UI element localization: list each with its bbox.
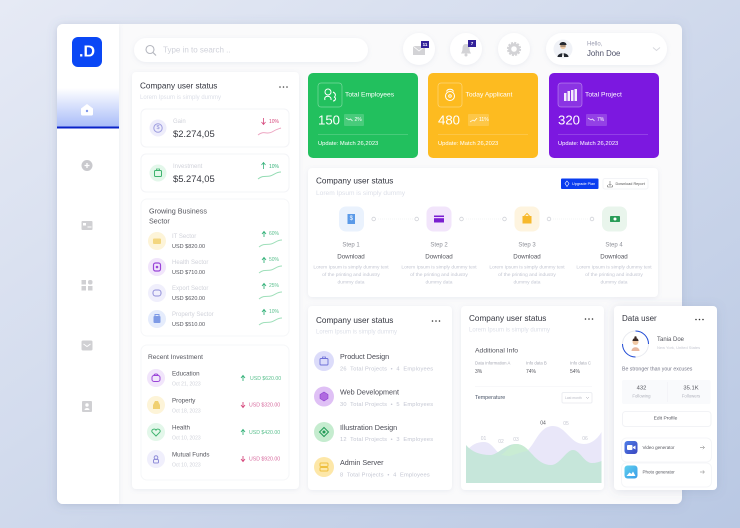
panel: data user	[614, 306, 717, 490]
menu dots	[279, 86, 288, 88]
stat card: total project: 7%	[597, 117, 605, 123]
area chart: 01	[481, 436, 486, 442]
education: Oct 21, 2023	[172, 382, 201, 388]
health sector: Health Sector	[172, 260, 208, 266]
export sector	[148, 283, 282, 302]
education: USD $620.00	[250, 376, 281, 382]
gain card: $2.274,05	[173, 128, 215, 139]
property sector	[148, 309, 282, 328]
step 1: $	[350, 216, 354, 222]
property: Oct 18, 2023	[172, 408, 201, 414]
step 3: Download	[513, 254, 541, 260]
temperature heading	[475, 392, 592, 403]
web development	[314, 386, 433, 408]
stat card: today applicant: 11%	[479, 117, 489, 123]
icon: card	[82, 221, 92, 230]
step 3: of the printing and industry	[498, 272, 556, 278]
additional info: 74%	[526, 369, 537, 375]
area chart: 02	[498, 439, 504, 445]
upgrade plan button: Upgrade Plan	[572, 182, 595, 186]
product design	[314, 351, 433, 372]
health sector: 50%	[269, 257, 280, 263]
heading: Company user status	[316, 316, 393, 325]
step 4: dummy data	[601, 280, 628, 286]
export sector: USD $620.00	[172, 296, 205, 302]
investment card: $5.274,05	[173, 173, 215, 184]
step 4: of the printing and industry	[585, 272, 643, 278]
edit profile button	[622, 412, 711, 426]
IT sector: USD $820.00	[172, 244, 205, 250]
stat card: total project	[549, 73, 659, 158]
property: Property	[172, 398, 196, 404]
admin server: 8 Total Projects • 4 Employees	[340, 472, 430, 478]
web development: 30 Total Projects • 5 Employees	[340, 402, 433, 408]
gain card	[141, 109, 289, 147]
heading: Company user status	[469, 314, 546, 323]
step 1	[313, 206, 389, 286]
IT sector: IT Sector	[172, 234, 196, 240]
area chart: 04	[540, 420, 546, 426]
health: Oct 10, 2023	[172, 436, 201, 442]
step 1: Download	[337, 254, 365, 260]
stat card: today applicant: 480	[438, 112, 460, 128]
connector dots	[372, 217, 594, 221]
property: USD $320.00	[249, 402, 280, 408]
stats: 35.1K	[683, 386, 699, 392]
step 1: of the printing and industry	[322, 272, 380, 278]
product design: 26 Total Projects • 4 Employees	[340, 366, 433, 372]
property sector: Property Sector	[172, 312, 214, 318]
search bar: Type in to search ..	[163, 46, 231, 54]
education	[147, 369, 281, 388]
user profile pill	[546, 33, 667, 65]
top icon: mail with badge: 11	[423, 42, 428, 47]
step 4: Lorem Ipsum is simply dummy text	[576, 264, 652, 270]
stats	[622, 380, 710, 404]
property sector: USD $510.00	[172, 322, 205, 328]
photo generator: Photo generator	[642, 470, 675, 474]
property	[147, 396, 280, 414]
step 3	[489, 206, 565, 286]
recent investment	[141, 345, 289, 480]
IT sector: 60%	[269, 231, 280, 237]
stat card: total project: Update: Match 26,2023	[558, 141, 618, 147]
additional info: Info data B	[526, 360, 547, 366]
download report button	[603, 178, 648, 189]
health sector: USD $710.00	[172, 270, 205, 276]
active nav item: home	[57, 88, 119, 128]
stat card: today applicant: Today Applicant	[466, 92, 512, 98]
health: Health	[172, 424, 190, 432]
mutual funds: Oct 10, 2023	[172, 462, 201, 468]
step 3: dummy data	[514, 280, 541, 286]
heading: Data user	[622, 314, 657, 323]
step 2	[401, 206, 477, 286]
gain card: 10%	[269, 119, 280, 125]
stat card: today applicant: Update: Match 26,2023	[438, 141, 498, 147]
investment card	[141, 154, 289, 192]
step 4	[576, 206, 652, 286]
subheading: Lorem Ipsum is simply dummy	[469, 328, 550, 334]
IT sector	[148, 231, 282, 250]
stat card: today applicant	[428, 73, 538, 158]
additional info: Data information A	[475, 360, 510, 366]
stat card: total employees: 150	[318, 112, 340, 128]
panel: company user status sidebar	[132, 72, 299, 489]
heading: Company user status	[140, 82, 217, 90]
health	[147, 423, 280, 442]
main dashboard panel	[57, 24, 682, 504]
additional info	[475, 348, 592, 387]
step 3: Lorem Ipsum is simply dummy text	[489, 264, 565, 270]
icon: add	[82, 160, 92, 171]
step 1: dummy data	[338, 280, 365, 286]
stat card: total project: 320	[558, 112, 580, 128]
growing business sector: Growing Business	[149, 206, 207, 216]
health sector	[148, 257, 282, 276]
export sector: 25%	[269, 283, 280, 289]
stat card: total employees	[308, 73, 418, 158]
step 2: of the printing and industry	[410, 272, 468, 278]
avatar	[622, 331, 648, 357]
area chart: 05	[563, 421, 569, 427]
user name: Tania Doe	[657, 337, 685, 343]
step 1: Step 1	[342, 242, 360, 248]
property sector: 10%	[269, 309, 280, 315]
growing business sector: Sector	[149, 216, 170, 226]
investment card: Investment	[173, 164, 203, 170]
heading: Company user status	[316, 176, 393, 186]
stat card: total employees: 2%	[354, 117, 362, 123]
area chart: 03	[513, 437, 519, 443]
edit profile button: Edit Profile	[654, 416, 678, 422]
logo	[72, 37, 102, 67]
stat card: total employees: Update: Match 26,2023	[318, 141, 378, 147]
step 4: Step 4	[605, 242, 623, 248]
education: Education	[172, 370, 200, 378]
step 4: Download	[600, 254, 628, 260]
user name	[657, 337, 700, 350]
top icon: settings	[498, 33, 530, 65]
step 1: Lorem Ipsum is simply dummy text	[313, 264, 389, 270]
health: USD $420.00	[249, 430, 280, 436]
stats: Following	[632, 394, 651, 398]
admin server: Admin Server	[340, 458, 384, 467]
step 3: Step 3	[518, 242, 536, 248]
temperature heading: Temperature	[475, 395, 505, 401]
step 2: dummy data	[426, 280, 453, 286]
panel: additional info and temperature chart	[461, 306, 604, 490]
sidebar	[57, 24, 119, 504]
temperature heading: Last month	[565, 396, 582, 400]
stats: Followers	[682, 394, 700, 398]
web development: Web Development	[340, 388, 399, 396]
step 2: Lorem Ipsum is simply dummy text	[401, 264, 477, 270]
search bar	[134, 38, 368, 62]
download report button: Download Report	[616, 182, 646, 186]
stats: 432	[637, 386, 646, 392]
video generator: Video generator	[642, 445, 675, 450]
additional info: Info data C	[570, 360, 591, 366]
top icon: bell with badge: 7	[471, 41, 474, 46]
mutual funds: Mutual Funds	[172, 452, 210, 458]
recent investment: Recent Investment	[148, 354, 203, 361]
video generator	[622, 438, 712, 462]
gain card: Gain	[173, 119, 186, 125]
investment card: 10%	[269, 164, 280, 170]
icon: grid	[82, 280, 92, 290]
logo: .D	[79, 44, 95, 60]
icon: inbox	[82, 340, 92, 350]
growing business sector	[141, 199, 289, 336]
menu dots	[585, 318, 593, 320]
area chart	[466, 420, 602, 483]
additional info: Additional Info	[475, 348, 518, 354]
export sector: Export Sector	[172, 286, 208, 292]
mutual funds: USD $920.00	[249, 456, 280, 462]
user profile pill: Hello,	[587, 42, 603, 48]
subheading: Lorem Ipsum is simply dummy	[316, 190, 406, 197]
icon: contact	[82, 401, 92, 412]
illustration design: 12 Total Projects • 3 Employees	[340, 437, 433, 443]
menu dots	[432, 320, 440, 322]
subheading: Lorem Ipsum is simply dummy	[316, 330, 397, 336]
panel: projects list	[308, 306, 452, 490]
menu dots	[695, 319, 704, 320]
panel: steps	[308, 168, 658, 297]
area chart: 06	[582, 436, 588, 442]
step 2: Step 2	[430, 242, 448, 248]
mutual funds	[147, 450, 280, 468]
stat card: total employees: Total Employees	[345, 92, 395, 98]
tagline: Be stronger than your excuses	[622, 366, 693, 372]
stat card: total project: Total Project	[585, 92, 622, 98]
illustration design: Illustration Design	[340, 423, 397, 432]
photo generator	[622, 463, 712, 487]
user name: New York, United States	[657, 345, 700, 350]
illustration design	[314, 422, 433, 443]
product design: Product Design	[340, 352, 389, 361]
additional info: 54%	[570, 369, 581, 375]
upgrade plan button	[561, 178, 598, 189]
admin server	[314, 457, 430, 478]
top icon: mail with badge	[403, 33, 435, 65]
user profile pill: John Doe	[587, 49, 620, 58]
step 2: Download	[425, 254, 453, 260]
top icon: bell with badge	[450, 33, 482, 65]
gain card: $	[156, 125, 160, 131]
subheading: Lorem Ipsum is simply dummy	[140, 95, 221, 101]
additional info: 3%	[475, 369, 483, 375]
